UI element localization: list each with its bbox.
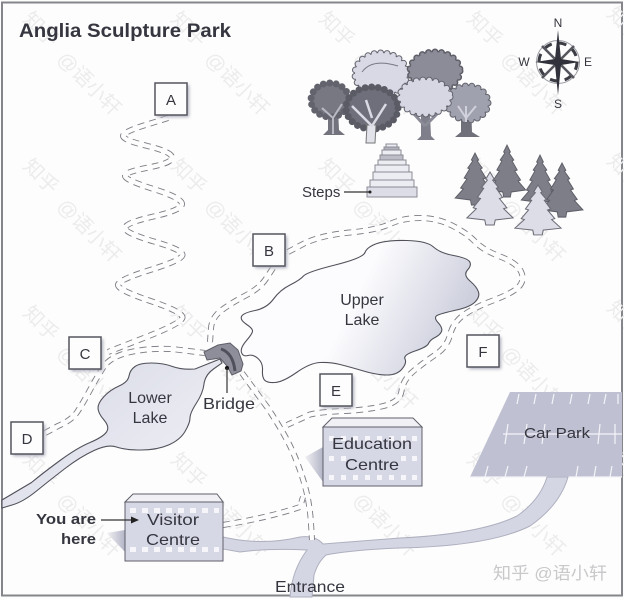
lower lake and river: Lake	[133, 410, 167, 427]
watermarks: 知乎	[166, 154, 211, 199]
tree: centre dark with pale trunk	[346, 87, 398, 143]
watermarks: @语小轩	[496, 488, 570, 561]
upper lake	[241, 240, 479, 383]
watermarks: @语小轩	[348, 488, 422, 561]
watermarks: @语小轩	[496, 194, 570, 267]
tree: dark back right	[410, 52, 460, 90]
watermarks: @语小轩	[348, 341, 422, 414]
watermarks: 知乎	[462, 7, 507, 52]
marker B	[253, 234, 287, 268]
you are here label: here	[61, 531, 96, 548]
marker A: A	[166, 92, 176, 109]
watermarks: @语小轩	[348, 194, 422, 267]
entrance label: Entrance	[275, 579, 345, 596]
watermarks: 知乎	[18, 301, 63, 346]
lower lake and river	[2, 359, 222, 508]
marker B: B	[264, 243, 274, 260]
steps	[367, 144, 417, 197]
upper lake: Lake	[345, 312, 379, 329]
car park label: Car Park	[524, 425, 591, 442]
watermarks: @语小轩	[200, 341, 274, 414]
marker E: E	[331, 383, 341, 400]
watermarks: 知乎	[314, 154, 359, 199]
you are here label	[36, 511, 96, 548]
tree: far left dark	[311, 83, 349, 135]
arrow: you are here	[101, 516, 139, 524]
marker C: C	[80, 346, 91, 363]
watermarks: 知乎	[314, 7, 359, 52]
watermarks: 知乎	[462, 301, 507, 346]
tree: far right medium	[448, 86, 488, 137]
walking trails	[45, 118, 523, 540]
watermarks: @语小轩	[52, 341, 126, 414]
watermarks: 知乎	[462, 448, 507, 493]
watermarks: 知乎	[314, 448, 359, 493]
watermarks: 知乎	[166, 7, 211, 52]
watermarks: @语小轩	[52, 47, 126, 120]
bridge label: Bridge	[203, 396, 255, 413]
education centre: Centre	[345, 457, 399, 474]
watermarks: @语小轩	[52, 488, 126, 561]
steps label: Steps	[302, 184, 340, 201]
deciduous trees	[311, 52, 488, 143]
tree: centre light	[400, 80, 450, 140]
compass: S	[554, 97, 562, 111]
watermarks: 知乎	[166, 448, 211, 493]
watermarks: 知乎	[18, 7, 63, 52]
watermarks: 知乎	[18, 154, 63, 199]
lower lake label: Lower	[128, 390, 172, 407]
watermarks: @语小轩	[200, 194, 274, 267]
education centre label: Education	[332, 436, 412, 453]
marker C	[69, 337, 103, 371]
marker D: D	[22, 431, 33, 448]
education centre	[305, 418, 422, 486]
watermarks: 知乎	[314, 301, 359, 346]
visitor centre	[107, 494, 223, 561]
marker A	[155, 83, 189, 117]
corner watermark: 知乎 @语小轩	[493, 564, 607, 583]
compass: W	[518, 55, 530, 69]
marker F	[467, 335, 501, 369]
watermarks: @语小轩	[200, 488, 274, 561]
roads	[223, 477, 568, 597]
bridge	[203, 343, 255, 413]
compass	[518, 16, 592, 111]
watermarks: @语小轩	[52, 194, 126, 267]
compass: N	[554, 16, 562, 30]
visitor centre label: Visitor	[147, 512, 200, 529]
marker E	[320, 374, 354, 408]
you are here label: You are	[36, 511, 96, 528]
tree: light back left	[355, 53, 407, 95]
watermarks: 知乎	[18, 448, 63, 493]
watermarks: 知乎	[462, 154, 507, 199]
watermarks: @语小轩	[348, 47, 422, 120]
watermarks: @语小轩	[496, 47, 570, 120]
steps label	[302, 184, 372, 201]
marker D	[11, 422, 45, 456]
compass: E	[584, 55, 592, 69]
watermarks: @语小轩	[200, 47, 274, 120]
watermarks: @语小轩	[496, 341, 570, 414]
visitor centre: Centre	[146, 532, 200, 549]
watermarks: 知乎	[166, 301, 211, 346]
title: Anglia Sculpture Park	[19, 21, 231, 42]
car park	[470, 392, 622, 477]
marker F: F	[478, 344, 488, 361]
conifer trees	[455, 145, 583, 235]
upper lake label: Upper	[340, 292, 384, 309]
